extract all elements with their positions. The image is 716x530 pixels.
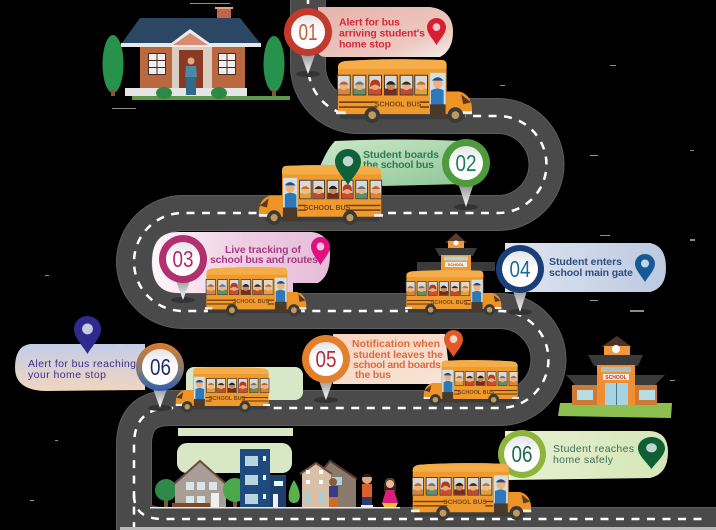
boy [361,474,373,508]
step 5 callout [302,330,463,403]
icon: step 1 pin [427,18,446,45]
step 3 marker [159,235,207,303]
bus 5 [424,360,519,405]
bus 7: SCHOOL BUS [443,499,487,506]
right tree [264,36,284,96]
step 3 text: school bus and routes [210,254,318,266]
step 4 callout [496,243,666,315]
bus 6 [176,367,270,412]
student at home [185,58,197,95]
pale backdrop behind neighbourhood [177,428,293,473]
step 4 marker [496,245,544,315]
step 7 marker [498,430,546,478]
step 2 text: Student boards [363,149,439,161]
bus 1: SCHOOL BUS [375,102,422,108]
step 1 marker: 01 [298,19,318,45]
icon: step 6 pin [74,316,101,354]
step 5 marker: 05 [316,346,336,372]
step 7 text: Student reaches [553,443,634,455]
step 5 text: student leaves the [353,349,443,361]
icon: step 3 pin [311,237,330,265]
step 5 text: Notification when [352,338,440,350]
step 7 marker: 06 [512,441,532,467]
step 2 callout [318,139,490,210]
step 6 callout: alert for bus [15,316,184,411]
step 5 text: the bus [355,369,391,381]
step 7 callout: reaches home [498,430,668,480]
step 4 marker: 04 [510,256,531,282]
step 2 marker [442,139,490,210]
pale backdrop behind left bus [186,367,303,400]
icon: step 5 pin [444,330,463,357]
step 5 marker [302,335,350,403]
left tree [102,35,124,96]
bus 3 [205,267,306,316]
bus 1 [336,59,472,123]
step 3 marker: 03 [172,246,194,272]
child in blue [329,478,338,507]
step 6 marker [136,343,184,411]
icon: step 2 pin [335,149,361,185]
small school behind bus [417,233,495,273]
step 2 text: the school bus [363,159,434,171]
bus 2: SCHOOL BUS [304,205,351,212]
blue apartment [240,449,286,508]
bus 3: SCHOOL BUS [233,299,270,305]
girl [382,478,398,507]
bus 4: SCHOOL BUS [431,300,468,306]
beige house [300,463,332,508]
step 1 text: home stop [339,38,391,50]
step 6 marker: 06 [150,354,171,380]
step 6 text: your home stop [28,369,106,381]
step 5 text: school and boards [353,359,441,371]
bus 6: SCHOOL BUS [209,396,246,402]
step 1 text: arriving student's [339,28,425,40]
icon: step 7 pin [638,437,665,469]
bus 2 [259,165,383,225]
school building [558,336,672,418]
step 3 callout [152,232,330,303]
step 2 marker: 02 [456,150,476,176]
bus 7 [411,463,531,520]
step 4 text: school main gate [549,267,633,279]
bus 5: SCHOOL BUS [458,390,495,396]
step 3 text: Live tracking of [225,244,302,256]
grey house [172,460,226,508]
small school behind bus: SCHOOL [448,263,465,267]
step 4 text: Student enters [549,256,622,268]
brown house [320,461,357,508]
bus 4 [405,270,501,315]
school building: SCHOOL [605,375,627,381]
tree [155,479,177,508]
house: home stop [102,7,290,100]
icon: step 4 pin [635,254,655,282]
small tree [289,480,300,503]
neighbourhood houses [150,449,400,508]
step 1 marker [284,8,332,77]
step 1 text: Alert for bus [339,16,400,28]
round tree [223,478,247,508]
step 1 callout [284,7,453,77]
step 6 text: Alert for bus reaching [28,358,136,370]
step 7 text: home safely [553,454,614,466]
